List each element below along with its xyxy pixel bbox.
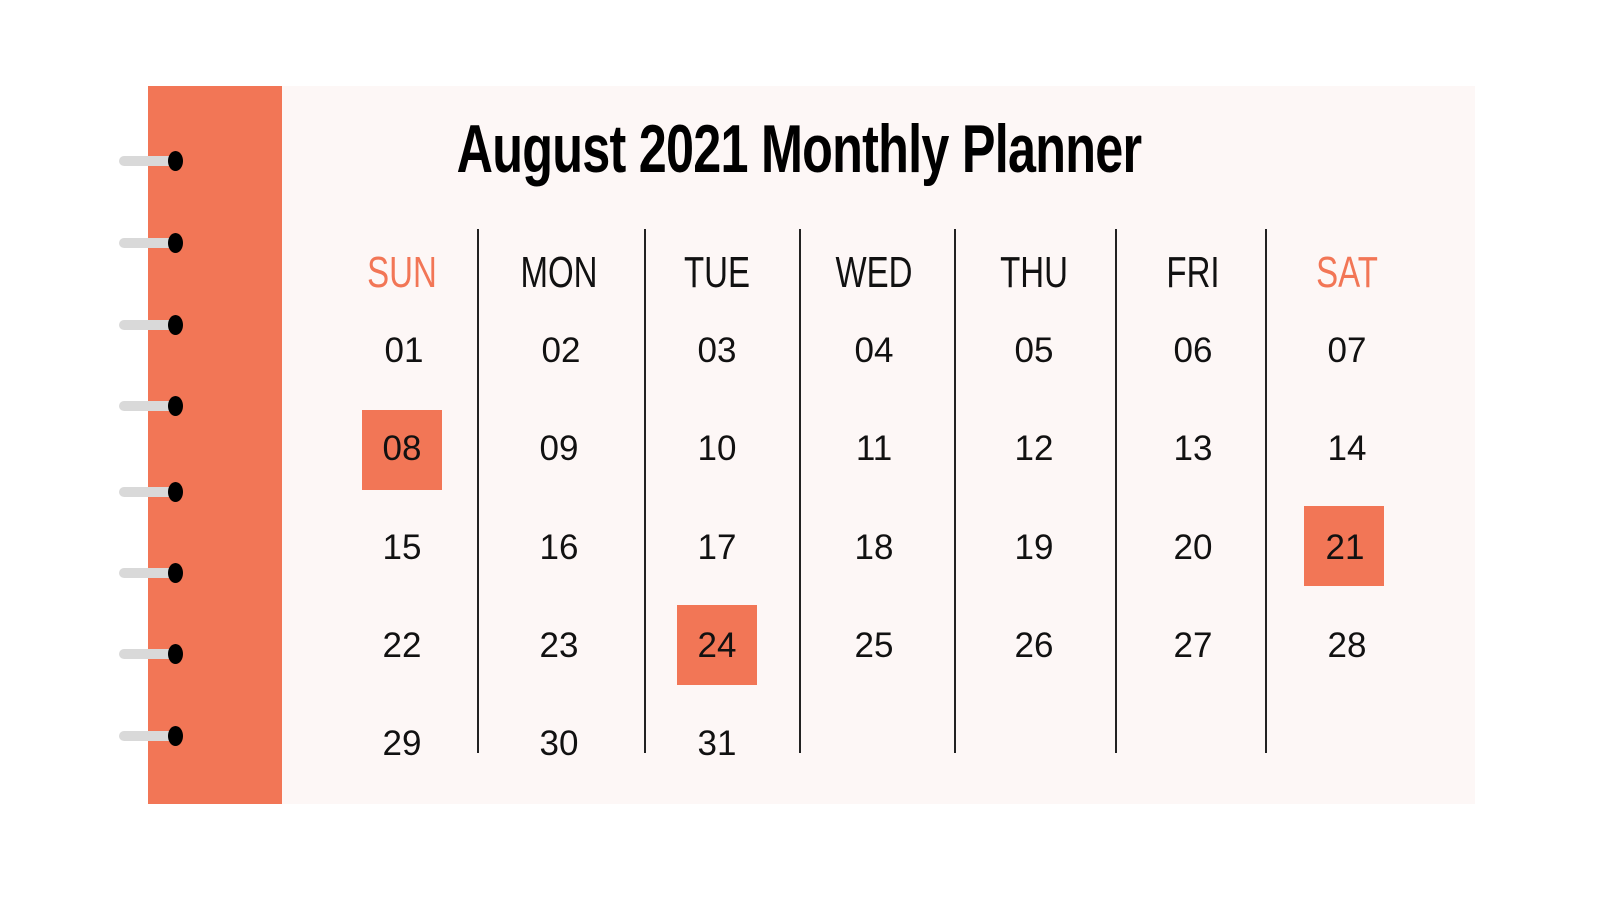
calendar dates: 04 (855, 331, 893, 370)
weekday headers: SUN (367, 248, 437, 297)
calendar dates: 17 (698, 528, 736, 567)
calendar dates: 31 (698, 724, 736, 763)
calendar dates: 28 (1328, 626, 1366, 665)
calendar dates: 06 (1174, 331, 1212, 370)
calendar dates: 13 (1174, 429, 1212, 468)
calendar dates: 26 (1015, 626, 1053, 665)
calendar dates: 09 (540, 429, 578, 468)
calendar dates: 30 (540, 724, 578, 763)
calendar dates: 20 (1174, 528, 1212, 567)
calendar dates: 29 (383, 724, 421, 763)
calendar dates: 05 (1015, 331, 1053, 370)
calendar dates: 21 (1326, 528, 1364, 567)
calendar dates: 15 (383, 528, 421, 567)
calendar dates: 16 (540, 528, 578, 567)
calendar dates: 11 (856, 429, 892, 468)
weekday headers: THU (1000, 248, 1068, 297)
panel: orange binding strip (148, 86, 282, 804)
calendar dates: 01 (385, 331, 423, 370)
calendar dates: 12 (1015, 429, 1053, 468)
calendar dates: 07 (1328, 331, 1366, 370)
calendar dates: 19 (1015, 528, 1053, 567)
calendar dates: 08 (383, 429, 421, 468)
weekday headers (367, 248, 1378, 297)
weekday headers: TUE (684, 248, 750, 297)
calendar dates: 18 (855, 528, 893, 567)
title: August 2021 Monthly Planner (457, 111, 1141, 187)
calendar dates: 27 (1174, 626, 1212, 665)
calendar dates: 25 (855, 626, 893, 665)
calendar dates: 03 (698, 331, 736, 370)
weekday headers: WED (836, 248, 912, 297)
weekday headers: SAT (1316, 248, 1378, 297)
calendar dates: 24 (698, 626, 736, 665)
weekday headers: FRI (1166, 248, 1220, 297)
weekday headers: MON (521, 248, 597, 297)
calendar dates: 23 (540, 626, 578, 665)
calendar dates: 22 (383, 626, 421, 665)
panel: planner page (282, 86, 1475, 804)
icon: spiral rings (119, 151, 183, 746)
calendar dates: 02 (542, 331, 580, 370)
calendar dates: 10 (698, 429, 736, 468)
calendar dates: 14 (1328, 429, 1366, 468)
